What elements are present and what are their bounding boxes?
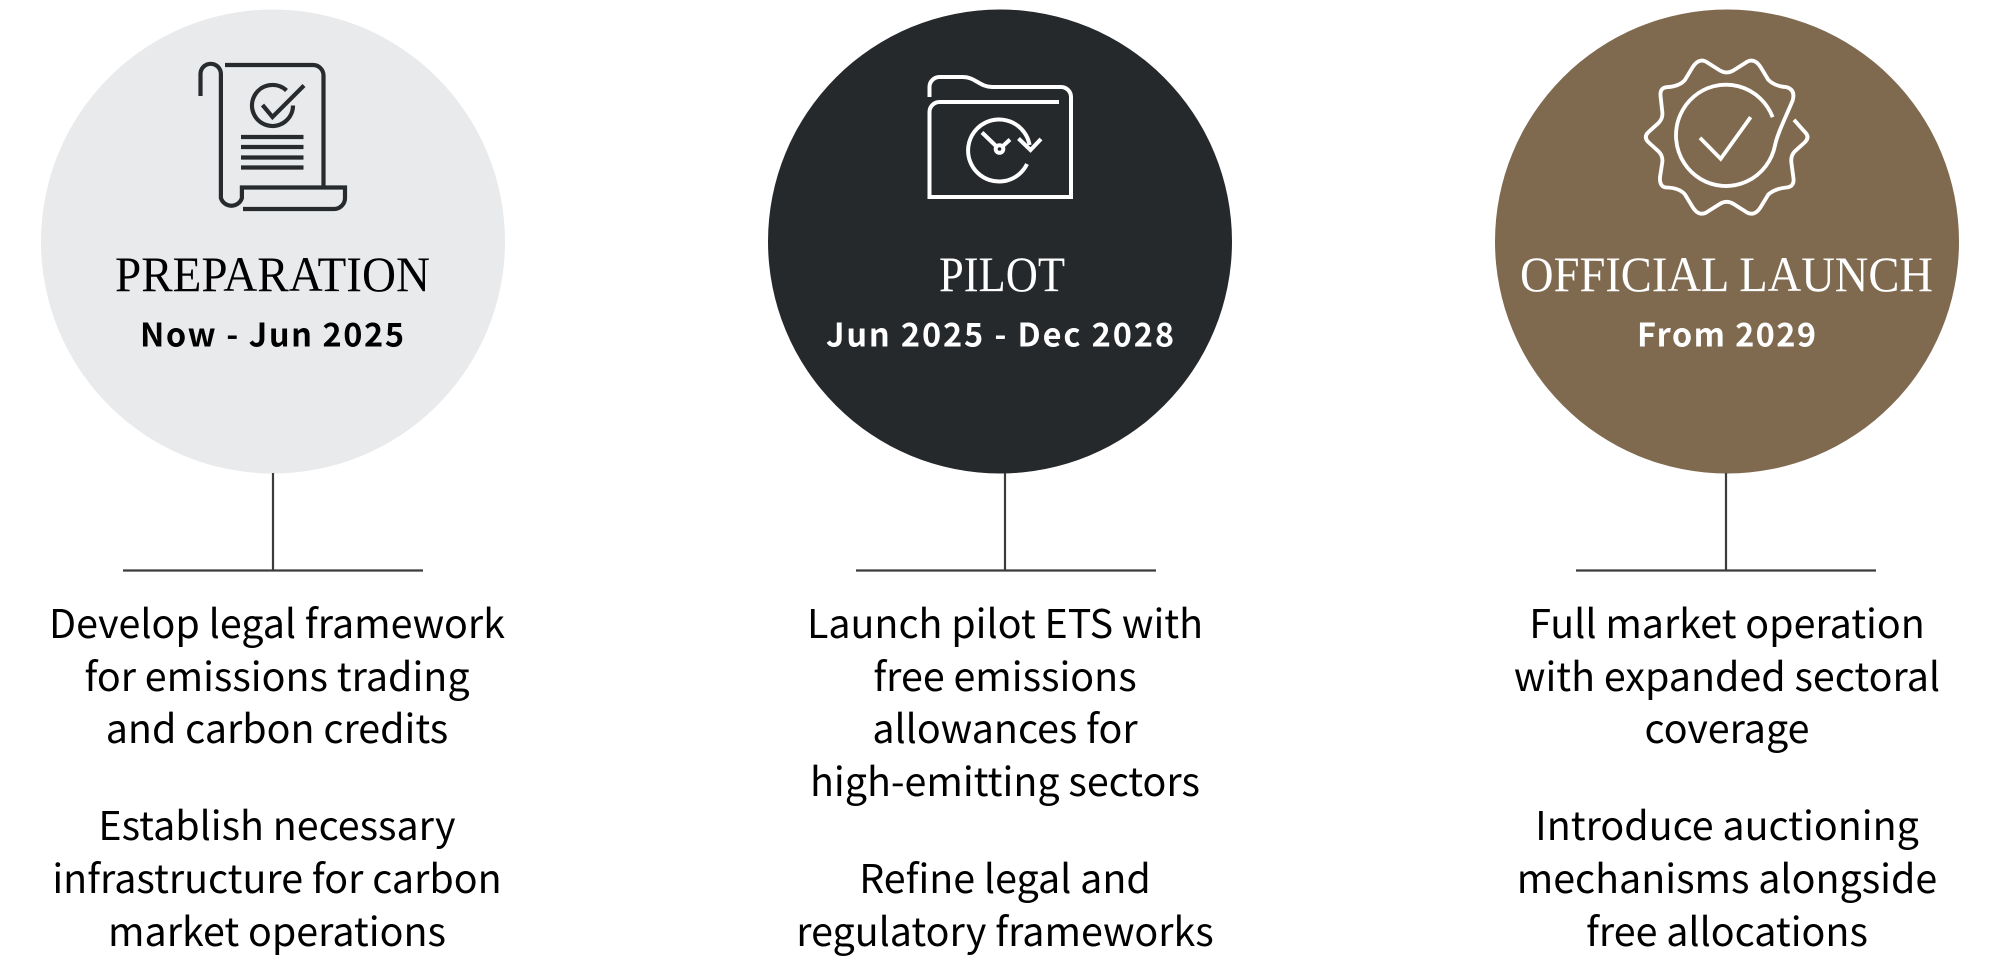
text block: pilot: regulatory frameworks — [796, 901, 1214, 958]
text block: pilot: high-emitting sectors — [810, 751, 1200, 808]
text block: preparation: infrastructure for carbon — [52, 848, 502, 905]
text block: official launch: coverage — [1645, 698, 1809, 755]
date: pilot: Jun 2025 - Dec 2028 — [826, 310, 1174, 356]
text block: preparation: for emissions trading — [84, 646, 470, 703]
text block: preparation — [49, 593, 505, 958]
text block: official launch: with expanded sectoral — [1514, 646, 1940, 703]
text block: preparation: and carbon credits — [106, 698, 448, 755]
text block: pilot: Refine legal and — [859, 848, 1151, 905]
connector: official launch — [1576, 473, 1876, 570]
text block: preparation: Develop legal framework — [49, 593, 505, 650]
circle: pilot — [768, 10, 1232, 474]
text block: official launch — [1514, 593, 1940, 958]
text block: pilot: Launch pilot ETS with — [807, 593, 1203, 650]
panel: pilot — [768, 10, 1232, 958]
text block: official launch: mechanisms alongside — [1517, 848, 1937, 905]
text block: official launch: Full market operation — [1529, 593, 1925, 650]
text block: preparation: market operations — [108, 901, 446, 958]
text block: pilot: allowances for — [872, 698, 1138, 755]
panel: preparation — [41, 10, 505, 958]
icon: folder with clock — [930, 77, 1071, 197]
heading: preparation: PREPARATION — [115, 246, 430, 302]
text block: pilot — [796, 593, 1214, 958]
text block: preparation: Establish necessary — [98, 795, 456, 852]
heading: pilot: PILOT — [939, 246, 1065, 302]
circle: official launch — [1495, 10, 1959, 474]
circle: preparation — [41, 10, 505, 474]
date: preparation: Now - Jun 2025 — [140, 310, 404, 356]
icon: scroll with check — [200, 64, 345, 209]
text block: official launch: free allocations — [1586, 901, 1868, 958]
date: official launch: From 2029 — [1637, 310, 1816, 356]
connector: preparation — [123, 473, 423, 570]
text block: official launch: Introduce auctioning — [1535, 795, 1919, 852]
text block: pilot: free emissions — [873, 646, 1137, 703]
heading: official launch: OFFICIAL LAUNCH — [1520, 246, 1933, 302]
icon: badge with check — [1646, 61, 1807, 214]
connector: pilot — [856, 473, 1156, 570]
panel: official launch — [1495, 10, 1959, 958]
